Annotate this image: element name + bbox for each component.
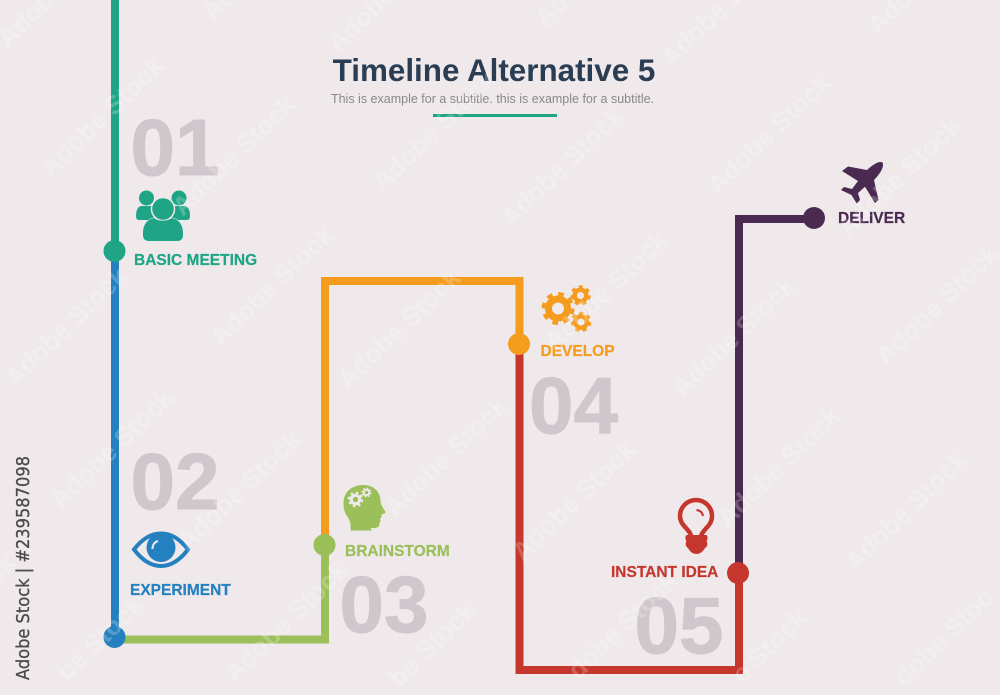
text: Adobe Stock: [0, 260, 134, 393]
step numbers: 03: [340, 560, 428, 649]
step numbers: 02: [130, 437, 219, 526]
milestone dot: develop: [508, 333, 530, 355]
label: instant idea: INSTANT IDEA: [611, 564, 718, 581]
step numbers: 01: [130, 103, 219, 192]
icon: people group: [136, 190, 190, 241]
icon: head with gears: [344, 485, 386, 530]
icon: light bulb: [680, 500, 712, 554]
label: basic meeting: BASIC MEETING: [134, 252, 257, 269]
step numbers: 05: [634, 581, 723, 670]
text: Adobe Stock: [34, 50, 170, 183]
text: Adobe Stock: [331, 262, 467, 395]
text: Adobe Stock: [44, 382, 180, 515]
text: Adobe Stock: [666, 270, 802, 403]
text: Adobe Stock: [171, 424, 307, 557]
milestone dot: basic meeting: [104, 240, 126, 262]
text: Adobe Stock: [378, 390, 514, 523]
step numbers: 04: [529, 361, 618, 450]
icon: airplane: [841, 162, 883, 204]
text: be Stock: [382, 595, 482, 693]
label: develop: DEVELOP: [540, 343, 615, 360]
text: e Stock: [726, 602, 814, 689]
text: Adobe Stock: [831, 110, 967, 243]
title underline: [433, 114, 557, 117]
label: experiment: EXPERIMENT: [130, 582, 231, 599]
text: Adobe Stock: [494, 100, 630, 233]
title: Timeline Alternative 5: [333, 53, 655, 88]
stock image id: Adobe Stock | #239587098: [13, 456, 34, 680]
text: Adobe Stock: [838, 444, 974, 577]
milestone dot: instant idea: [727, 562, 749, 584]
icon: gears: [544, 287, 590, 330]
text: Adobe Stock: [204, 219, 340, 352]
text: Adobe Stock: [366, 64, 502, 197]
milestone dot: experiment: [104, 626, 126, 648]
text: be Stock: [50, 589, 150, 687]
text: Adobe Stock: [538, 224, 674, 357]
text: dobe Stock: [562, 565, 684, 685]
milestone dot: brainstorm: [314, 534, 336, 556]
icon: eye: [134, 533, 188, 566]
subtitle: This is example for a subtitle. this is example for a subtitle.: [331, 92, 654, 106]
text: dobe Stoc: [888, 583, 999, 692]
timeline path: [115, 0, 814, 670]
label: brainstorm: BRAINSTORM: [345, 543, 450, 560]
text: Adobe Stock: [701, 67, 837, 200]
label: deliver: DELIVER: [838, 210, 905, 227]
text: Adobe Stock: [166, 89, 302, 222]
milestone dot: deliver: [803, 207, 825, 229]
step numbers: [130, 103, 723, 670]
text: Adobe Stock: [711, 400, 847, 533]
text: Adobe Stock: [506, 434, 642, 567]
text: Adobe Stock: [218, 555, 354, 688]
